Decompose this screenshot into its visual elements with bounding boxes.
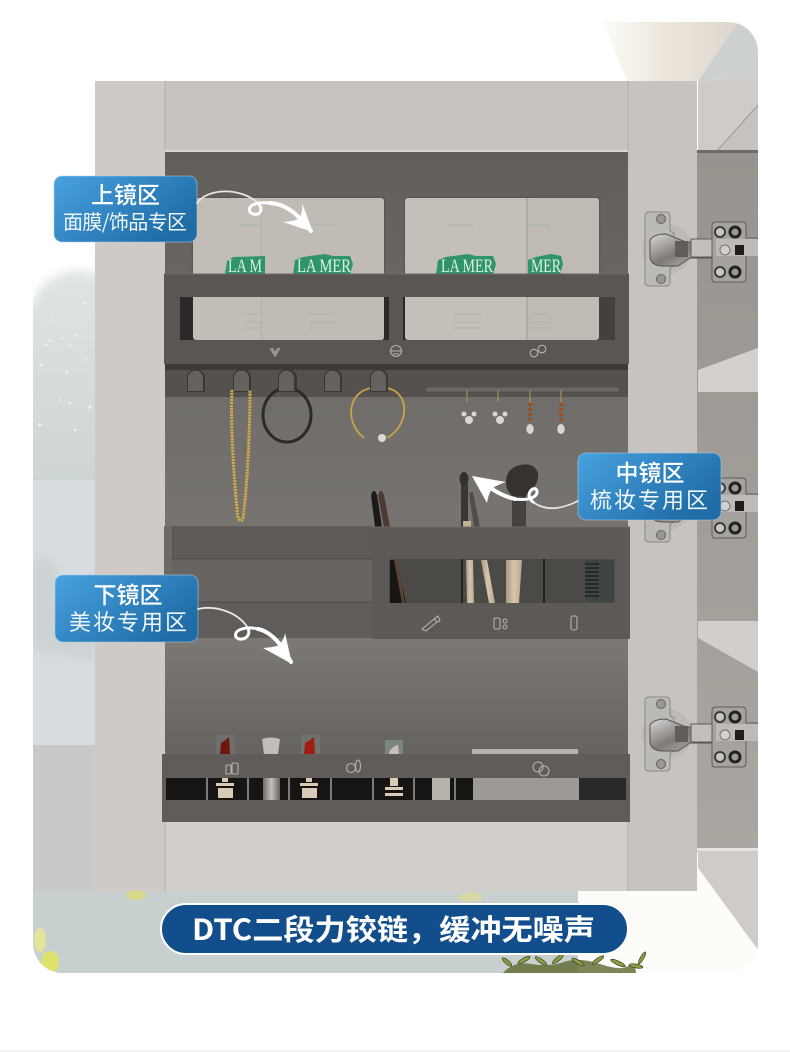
back wall panel xyxy=(165,152,628,822)
callout subtitle: 面膜/饰品专区 xyxy=(63,206,187,235)
brushes above holder xyxy=(460,464,538,527)
icon: bottles xyxy=(494,618,507,629)
jewellery bar xyxy=(426,387,619,392)
headline pill xyxy=(161,904,628,954)
icon: comb xyxy=(571,616,577,630)
callout: upper zone xyxy=(54,176,197,242)
icon: palette rings xyxy=(533,762,549,776)
magazines left xyxy=(192,197,385,340)
compact xyxy=(432,778,450,800)
arrow: lower zone xyxy=(198,608,292,664)
headline text: DTC二段力铰链，缓冲无噪声 xyxy=(192,907,595,949)
icon: compact and brush xyxy=(346,760,360,772)
hook rail strip xyxy=(165,364,628,397)
dividers xyxy=(462,559,544,603)
gold necklace xyxy=(232,390,250,520)
callout title: 中镜区 xyxy=(616,454,684,488)
bottom page edge xyxy=(0,1050,790,1052)
earrings xyxy=(462,390,565,434)
icon: cosmetics xyxy=(226,763,238,774)
arrow: middle zone xyxy=(472,476,578,508)
callout title: 上镜区 xyxy=(91,176,160,210)
pencils in holder xyxy=(390,560,406,603)
cabinet door frame xyxy=(95,81,697,891)
icon: brush xyxy=(422,616,440,631)
hook over ring xyxy=(278,369,296,392)
magazines right xyxy=(404,197,600,340)
comb xyxy=(585,560,614,602)
middle mirror zone tray xyxy=(164,526,630,639)
shelf window backing xyxy=(180,297,616,340)
right cabinet interior xyxy=(697,77,758,973)
bottom rail xyxy=(165,822,628,891)
background: tree and window view xyxy=(33,268,95,890)
shelf 3 xyxy=(698,851,758,950)
icon: rings xyxy=(530,345,546,357)
callout title: 下镜区 xyxy=(94,576,162,610)
brush holder front xyxy=(372,527,630,639)
right stile xyxy=(628,81,697,891)
shelf 2 xyxy=(698,621,758,672)
upper mirror zone shelf xyxy=(164,197,629,364)
gold bangle xyxy=(351,369,404,442)
silver tube xyxy=(263,778,280,800)
lower mirror zone lipstick tray xyxy=(162,735,630,822)
callout subtitle: 美妆专用区 xyxy=(69,605,187,637)
shelf front bar xyxy=(164,274,629,364)
hinge: top xyxy=(642,212,758,286)
magazines right: LA MER xyxy=(441,256,493,277)
callout: middle zone xyxy=(578,453,721,520)
lipstick bases xyxy=(216,778,403,798)
background: grey corner xyxy=(698,22,758,81)
top rail xyxy=(165,81,628,152)
magazines left: LA M xyxy=(228,256,262,277)
cell dividers xyxy=(207,778,455,800)
hooks xyxy=(187,369,388,392)
icon: face xyxy=(390,346,402,356)
callout subtitle: 梳妆专用区 xyxy=(590,483,708,515)
left stacked tray xyxy=(164,526,372,638)
tray body xyxy=(162,754,630,822)
shelf 1 xyxy=(698,348,758,392)
hinge: bottom xyxy=(642,697,758,771)
magazines right: MER xyxy=(531,256,561,277)
background: bottom garden band xyxy=(33,891,578,973)
black ring xyxy=(263,388,311,442)
left stile xyxy=(95,81,165,891)
pencils above holder xyxy=(371,491,390,527)
hinge: middle xyxy=(644,478,758,542)
brush handles xyxy=(466,560,474,603)
palette xyxy=(473,778,579,800)
callout: lower zone xyxy=(55,575,198,642)
background: ceiling beige xyxy=(602,22,738,81)
background: plant xyxy=(501,951,647,973)
icon: mask xyxy=(270,348,280,356)
items above tray xyxy=(216,735,578,755)
magazines left: LA MER xyxy=(297,256,351,277)
arrow: upper zone xyxy=(197,191,313,232)
